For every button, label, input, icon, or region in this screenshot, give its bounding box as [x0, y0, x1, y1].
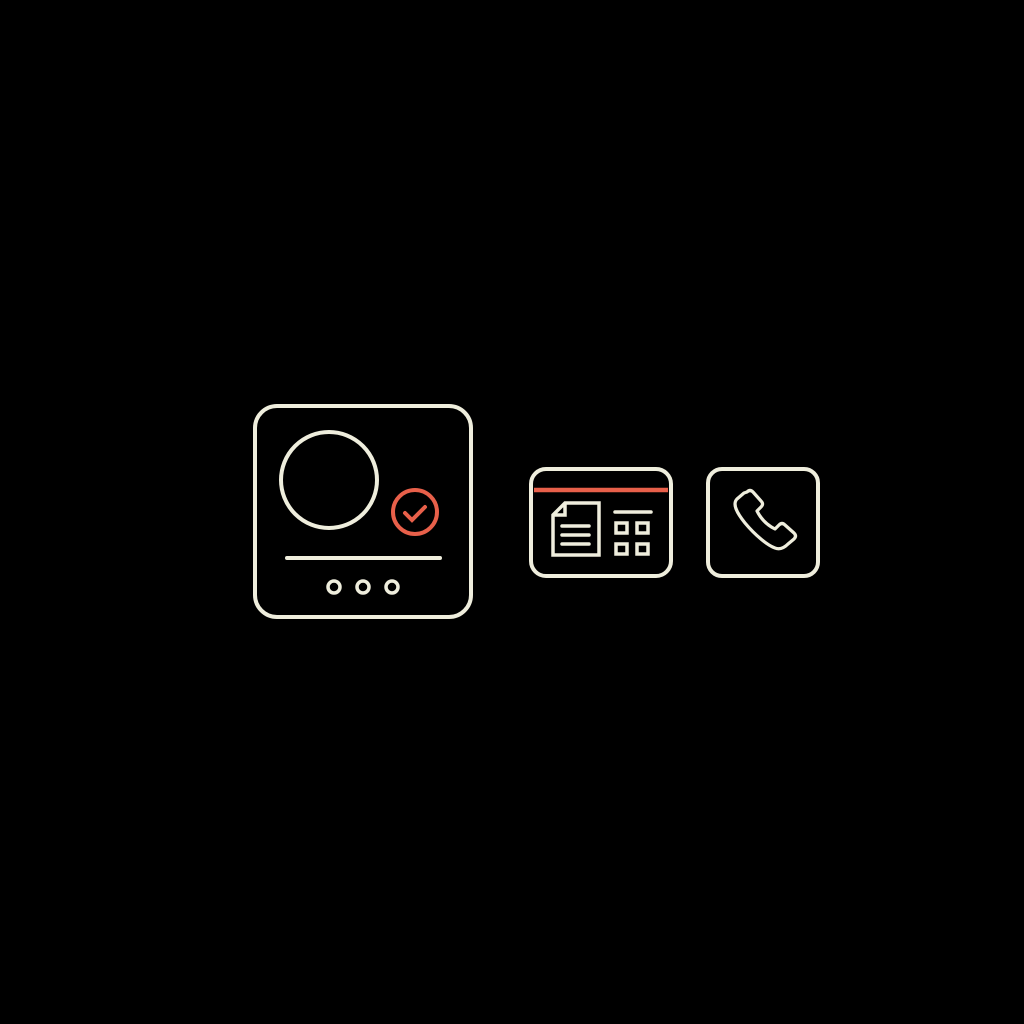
icon: grid	[615, 512, 651, 554]
icon: three dots	[328, 581, 398, 593]
panel: document and grid card	[531, 469, 671, 576]
icon: verified check	[393, 490, 437, 534]
icon: phone handset	[735, 490, 796, 549]
icon: avatar circle	[281, 432, 377, 528]
panel: phone card	[708, 469, 818, 576]
icon: document	[553, 503, 599, 555]
panel: profile card	[255, 406, 471, 617]
